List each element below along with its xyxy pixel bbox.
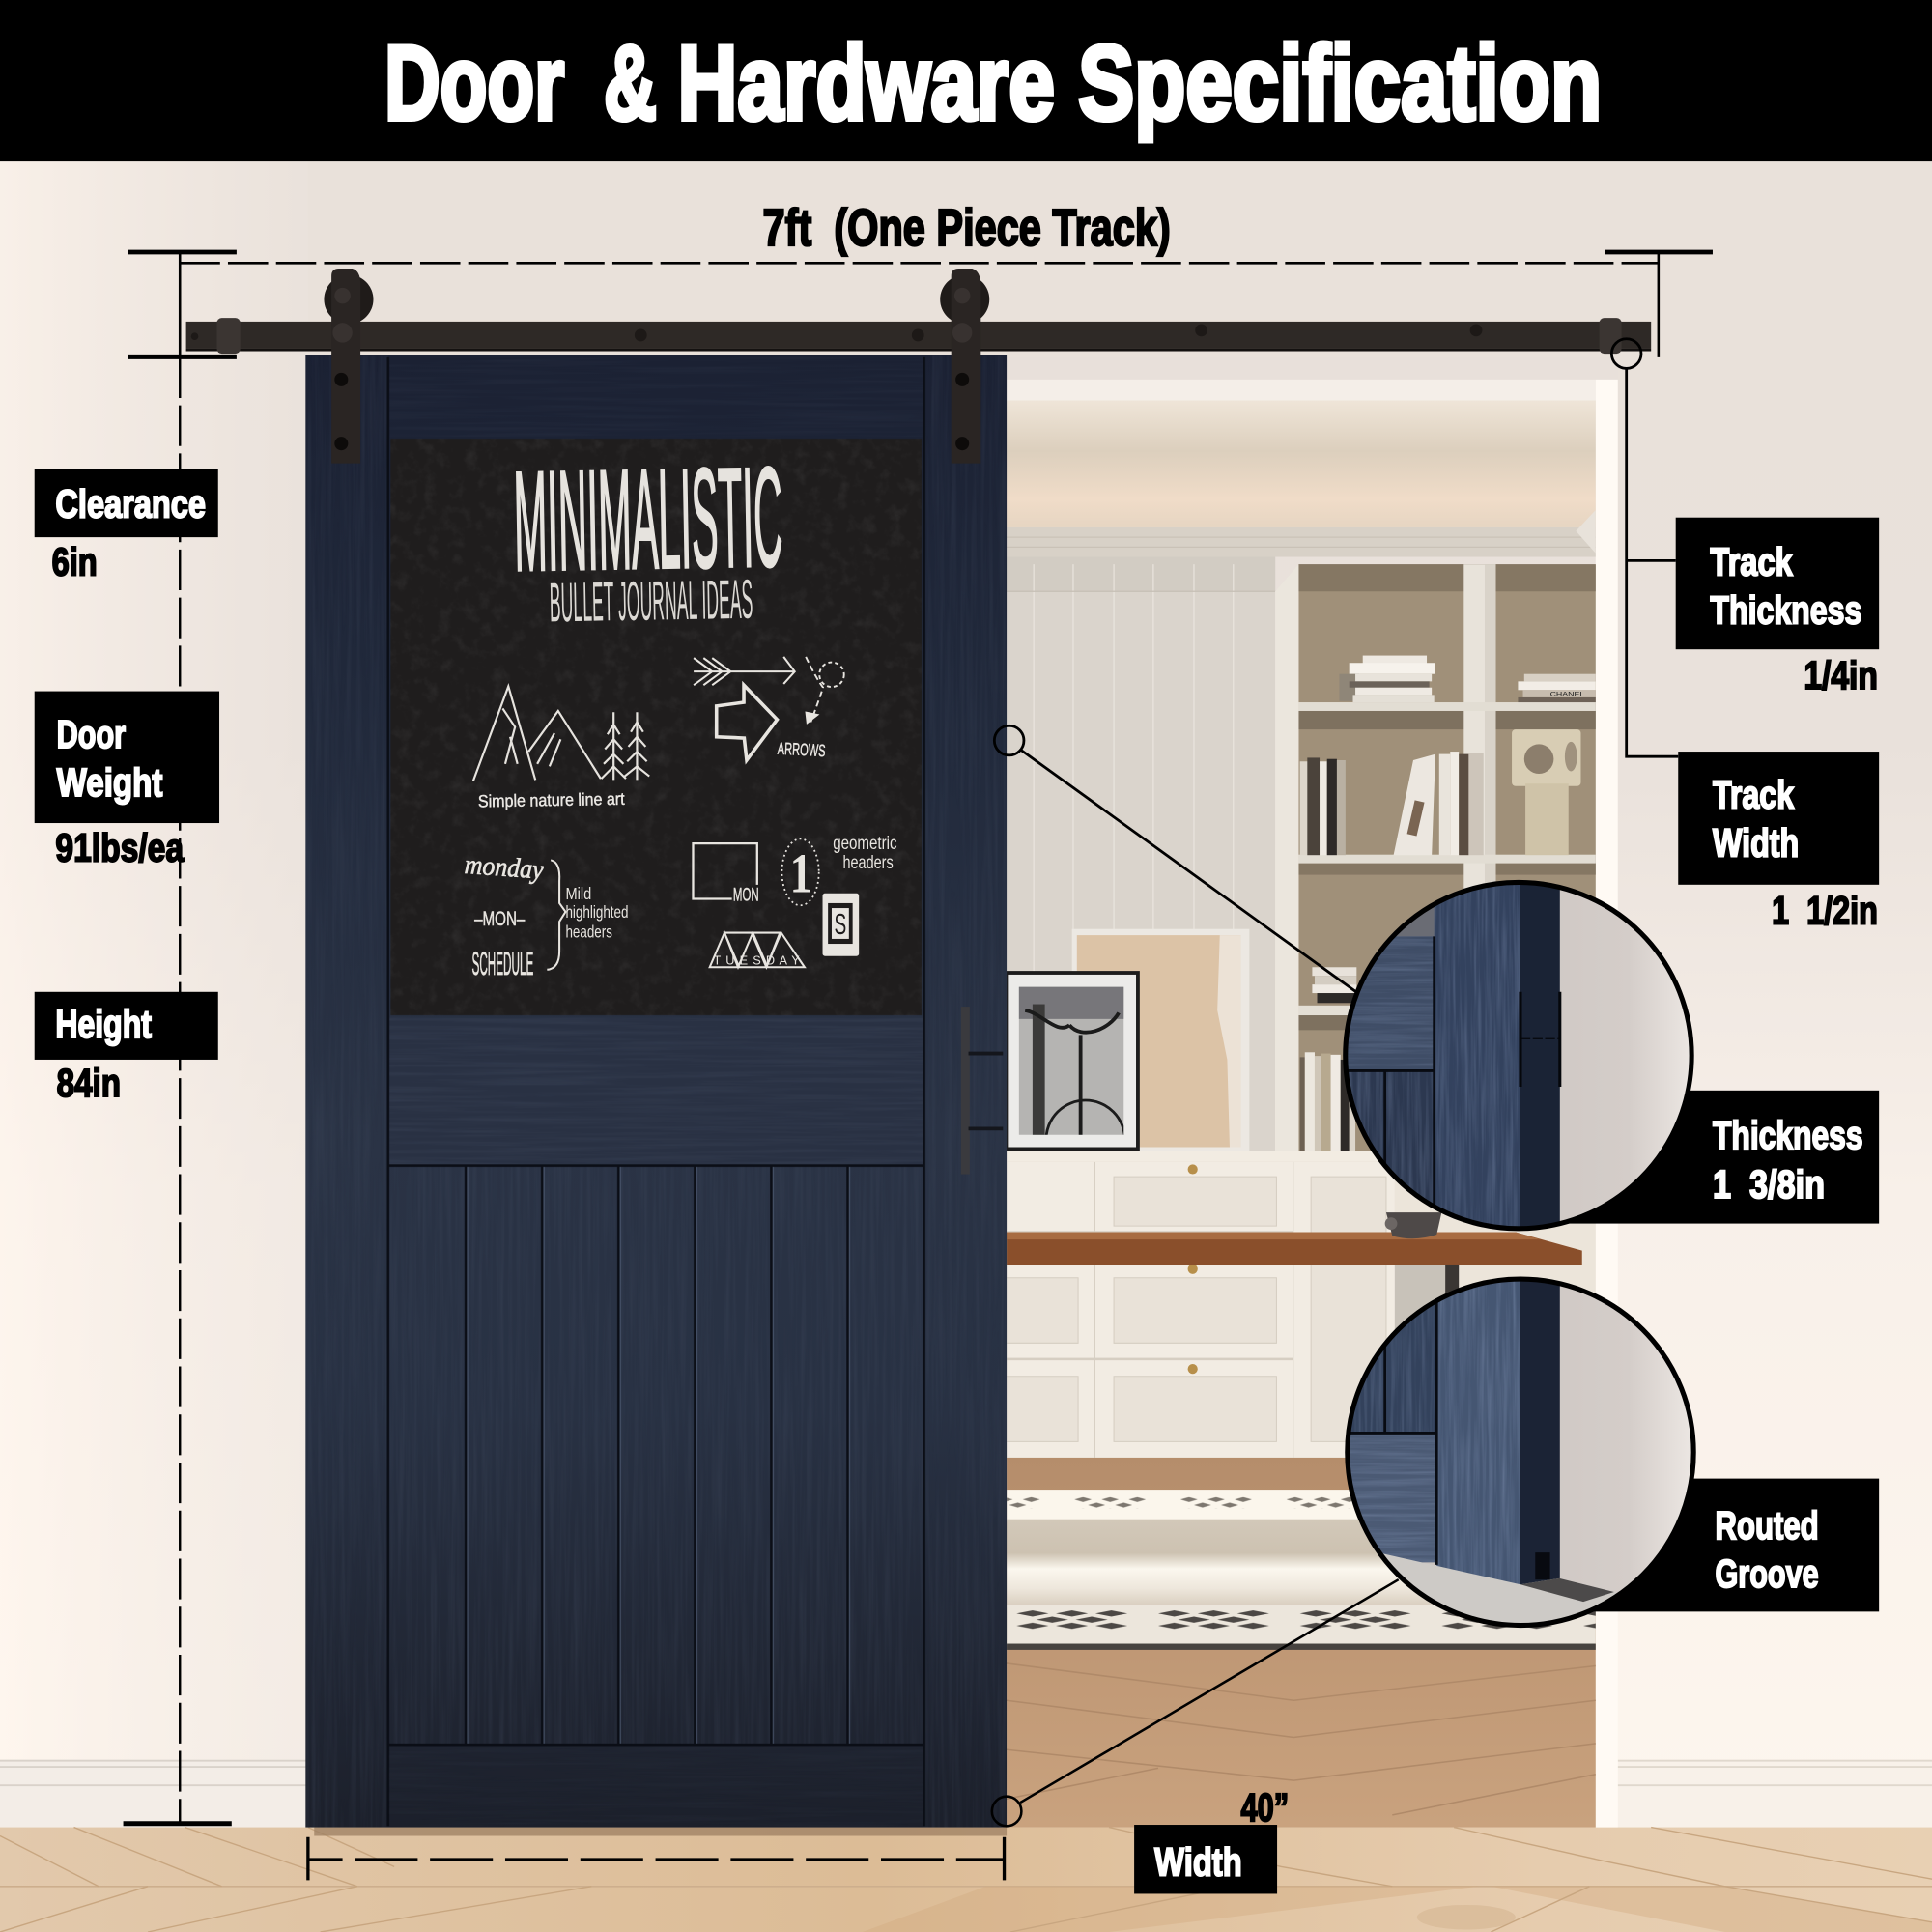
chalk: highlighted headers — [464, 850, 629, 982]
door frame reveal — [1007, 357, 1618, 1828]
label: routed groove: Routed — [1716, 1503, 1819, 1548]
track rail — [186, 318, 1651, 354]
chalk: geometric headers — [693, 834, 897, 956]
books: second shelf left — [1300, 757, 1346, 855]
label: door weight: 91lbs/ea — [55, 826, 184, 870]
label: door weight: Weight — [57, 760, 163, 805]
chalk: geometric headers: S — [835, 908, 846, 941]
door shadow on floor — [314, 1828, 1007, 1836]
baseboard: right — [1618, 1759, 1932, 1828]
handle — [961, 1007, 1003, 1175]
books: upper right stack — [1518, 674, 1596, 702]
barn door — [305, 355, 1007, 1836]
crown molding — [1007, 510, 1596, 557]
label: height — [35, 992, 218, 1105]
chalk: geometric headers: headers — [842, 853, 894, 873]
room floor — [1007, 1458, 1596, 1828]
title band — [0, 0, 1932, 161]
leader: routed groove pointer — [992, 1579, 1399, 1826]
middle rail — [389, 1018, 923, 1164]
label: height: Height — [55, 1002, 152, 1046]
label: door thickness: Thickness — [1713, 1113, 1863, 1157]
chalk: geometric headers: 1 — [790, 841, 812, 904]
books: second shelf right — [1394, 752, 1484, 855]
label: door weight — [35, 692, 219, 870]
chalk caption: arrows: ARROWS — [777, 739, 826, 760]
dimension: door width — [308, 1837, 1005, 1880]
wainscot wall — [1007, 557, 1275, 1161]
title: Hardware — [678, 25, 1055, 143]
label: track thickness: 1/4in — [1804, 653, 1878, 697]
chalk: geometric headers: MON — [733, 885, 759, 905]
label: clearance: Clearance — [55, 482, 206, 526]
rug — [1007, 1490, 1596, 1650]
label: routed groove — [1589, 1479, 1879, 1611]
label: clearance: 6in — [52, 540, 98, 584]
table — [1007, 1233, 1582, 1293]
chalkboard — [390, 439, 922, 1015]
books: lower shelves — [1300, 967, 1356, 1151]
label: door thickness: 1 3/8in — [1713, 1162, 1825, 1207]
books: upper right stack: CHANEL — [1550, 692, 1585, 698]
label: width: 40” — [1240, 1785, 1289, 1830]
chalk: tuesday bunting: T U E S D A Y — [714, 953, 800, 968]
wood grain: stiles — [305, 356, 1007, 1828]
bottom rail — [389, 1746, 923, 1826]
left stopper — [216, 318, 241, 354]
top rail — [389, 356, 923, 437]
ceiling — [1007, 401, 1596, 527]
label: track width: Track — [1713, 773, 1794, 817]
hanger: right — [940, 269, 989, 464]
dimension: clearance and height — [124, 252, 237, 1824]
label: track width: 1 1/2in — [1772, 889, 1878, 933]
dimension: track length — [128, 252, 1713, 357]
title: & — [604, 25, 657, 143]
books: upper shelf stack — [1339, 656, 1435, 702]
baseboard: left — [0, 1759, 308, 1828]
title: Specification — [1078, 25, 1602, 143]
label: door weight: Door — [57, 712, 126, 756]
artwork: bicycle photo — [1007, 971, 1140, 1151]
sculpture — [1512, 729, 1580, 855]
chalkboard: BULLET JOURNAL IDEAS — [549, 569, 753, 634]
bookcase — [1275, 564, 1596, 1151]
label: track width — [1678, 752, 1879, 933]
label: height: 84in — [57, 1061, 121, 1105]
chalk: highlighted headers: monday — [464, 850, 545, 886]
chalk: tuesday bunting — [710, 933, 805, 968]
right stopper — [1600, 318, 1622, 354]
label: track width: Width — [1713, 820, 1799, 865]
label: width — [1134, 1785, 1289, 1893]
label: width: Width — [1154, 1839, 1242, 1884]
chalk: geometric headers: geometric — [833, 834, 897, 854]
chalk: arrows — [694, 657, 844, 760]
door slab — [305, 355, 1007, 1828]
barn door: MINIMALISTIC — [513, 439, 783, 601]
label: clearance — [35, 469, 218, 584]
hanger: left — [324, 269, 373, 464]
title — [384, 25, 1602, 143]
label: track thickness: Thickness — [1710, 587, 1861, 632]
vertical planks — [388, 357, 924, 1826]
artwork: beige watercolor — [1072, 929, 1249, 1151]
label: door thickness — [1565, 1091, 1879, 1224]
label: routed groove: Groove — [1716, 1551, 1819, 1596]
chalk: highlighted headers: headers — [565, 923, 612, 942]
herringbone floor — [0, 1828, 1932, 1932]
title: Door — [384, 25, 564, 143]
leader: thickness pointer — [994, 725, 1358, 993]
chalk: highlighted headers: Mild — [565, 884, 591, 903]
cabinets — [1007, 1151, 1596, 1463]
label: track thickness: Track — [1710, 540, 1793, 584]
leader: track callouts — [1611, 339, 1678, 756]
magnifier: door thickness detail — [1343, 881, 1700, 1233]
herringbone floor in room — [1007, 1663, 1596, 1815]
magnifier: routed groove detail — [1343, 1279, 1700, 1638]
label: track thickness — [1676, 518, 1879, 697]
chalk: mountains and trees — [473, 686, 649, 781]
cup — [1385, 1212, 1441, 1238]
room seen through the doorway — [1005, 357, 1618, 1828]
chalk: highlighted headers: –MON– — [474, 906, 526, 930]
track length label: 7ft (One Piece Track) — [763, 200, 1171, 257]
chalk: highlighted headers: highlighted — [565, 902, 629, 922]
chalk: highlighted headers: SCHEDULE — [472, 946, 533, 982]
track bolts — [191, 324, 1482, 341]
chalk caption: nature: Simple nature line art — [478, 789, 625, 811]
